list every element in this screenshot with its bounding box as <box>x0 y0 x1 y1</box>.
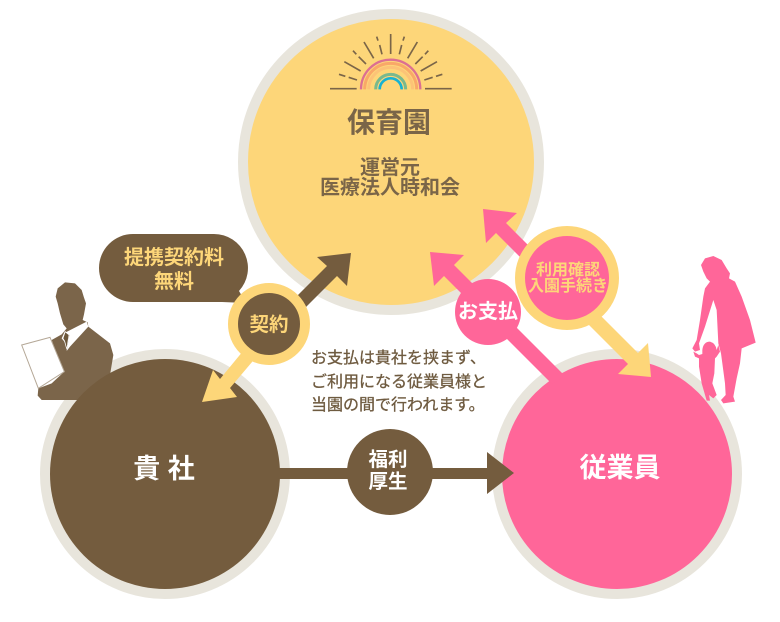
text: operator: 医療法人時和会 <box>320 176 460 199</box>
icon: rainbow with sun rays <box>330 34 452 89</box>
speech bubble: free partnership fee: 提携契約料 <box>124 246 224 269</box>
badge: welfare <box>347 429 433 515</box>
badge: welfare: 福利 <box>368 449 408 471</box>
text: operator: 運営元 <box>360 156 420 179</box>
icon: mother and child silhouette <box>692 256 756 403</box>
arrow: contract to nursery <box>292 253 351 311</box>
badge: enrolment <box>520 231 614 325</box>
icon: businessman with document <box>22 282 113 400</box>
label: employees: 従業員 <box>580 453 660 483</box>
badge: enrolment: 入園手続き <box>528 276 608 295</box>
arrow: enrolment to nursery <box>483 209 537 264</box>
speech bubble: free partnership fee <box>99 234 248 303</box>
circle: employees <box>497 354 737 594</box>
speech bubble: free partnership fee: 無料 <box>154 270 194 293</box>
circle: nursery <box>243 14 539 310</box>
badge: enrolment: 利用確認 <box>536 260 600 279</box>
text: payment note: お支払は貴社を挟まず、 <box>311 349 486 367</box>
label: your company: 貴 社 <box>133 454 195 484</box>
arrow: enrolment to employees <box>585 310 651 377</box>
circle: your company <box>50 359 280 589</box>
circle: your company ring <box>45 354 285 594</box>
heading: nursery: 保育園 <box>347 107 431 138</box>
arrow: welfare to employees <box>278 452 514 494</box>
badge: payment <box>455 279 521 345</box>
badge: contract <box>233 288 305 360</box>
arrow: contract to company <box>202 345 258 402</box>
text: payment note: 当園の間で行われます。 <box>311 396 485 414</box>
badge: payment: お支払 <box>458 300 518 323</box>
badge: welfare: 厚生 <box>368 471 408 493</box>
text: payment note: ご利用になる従業員様と <box>311 373 487 391</box>
arrow: payment to nursery <box>430 252 565 384</box>
badge: contract: 契約 <box>249 314 289 336</box>
